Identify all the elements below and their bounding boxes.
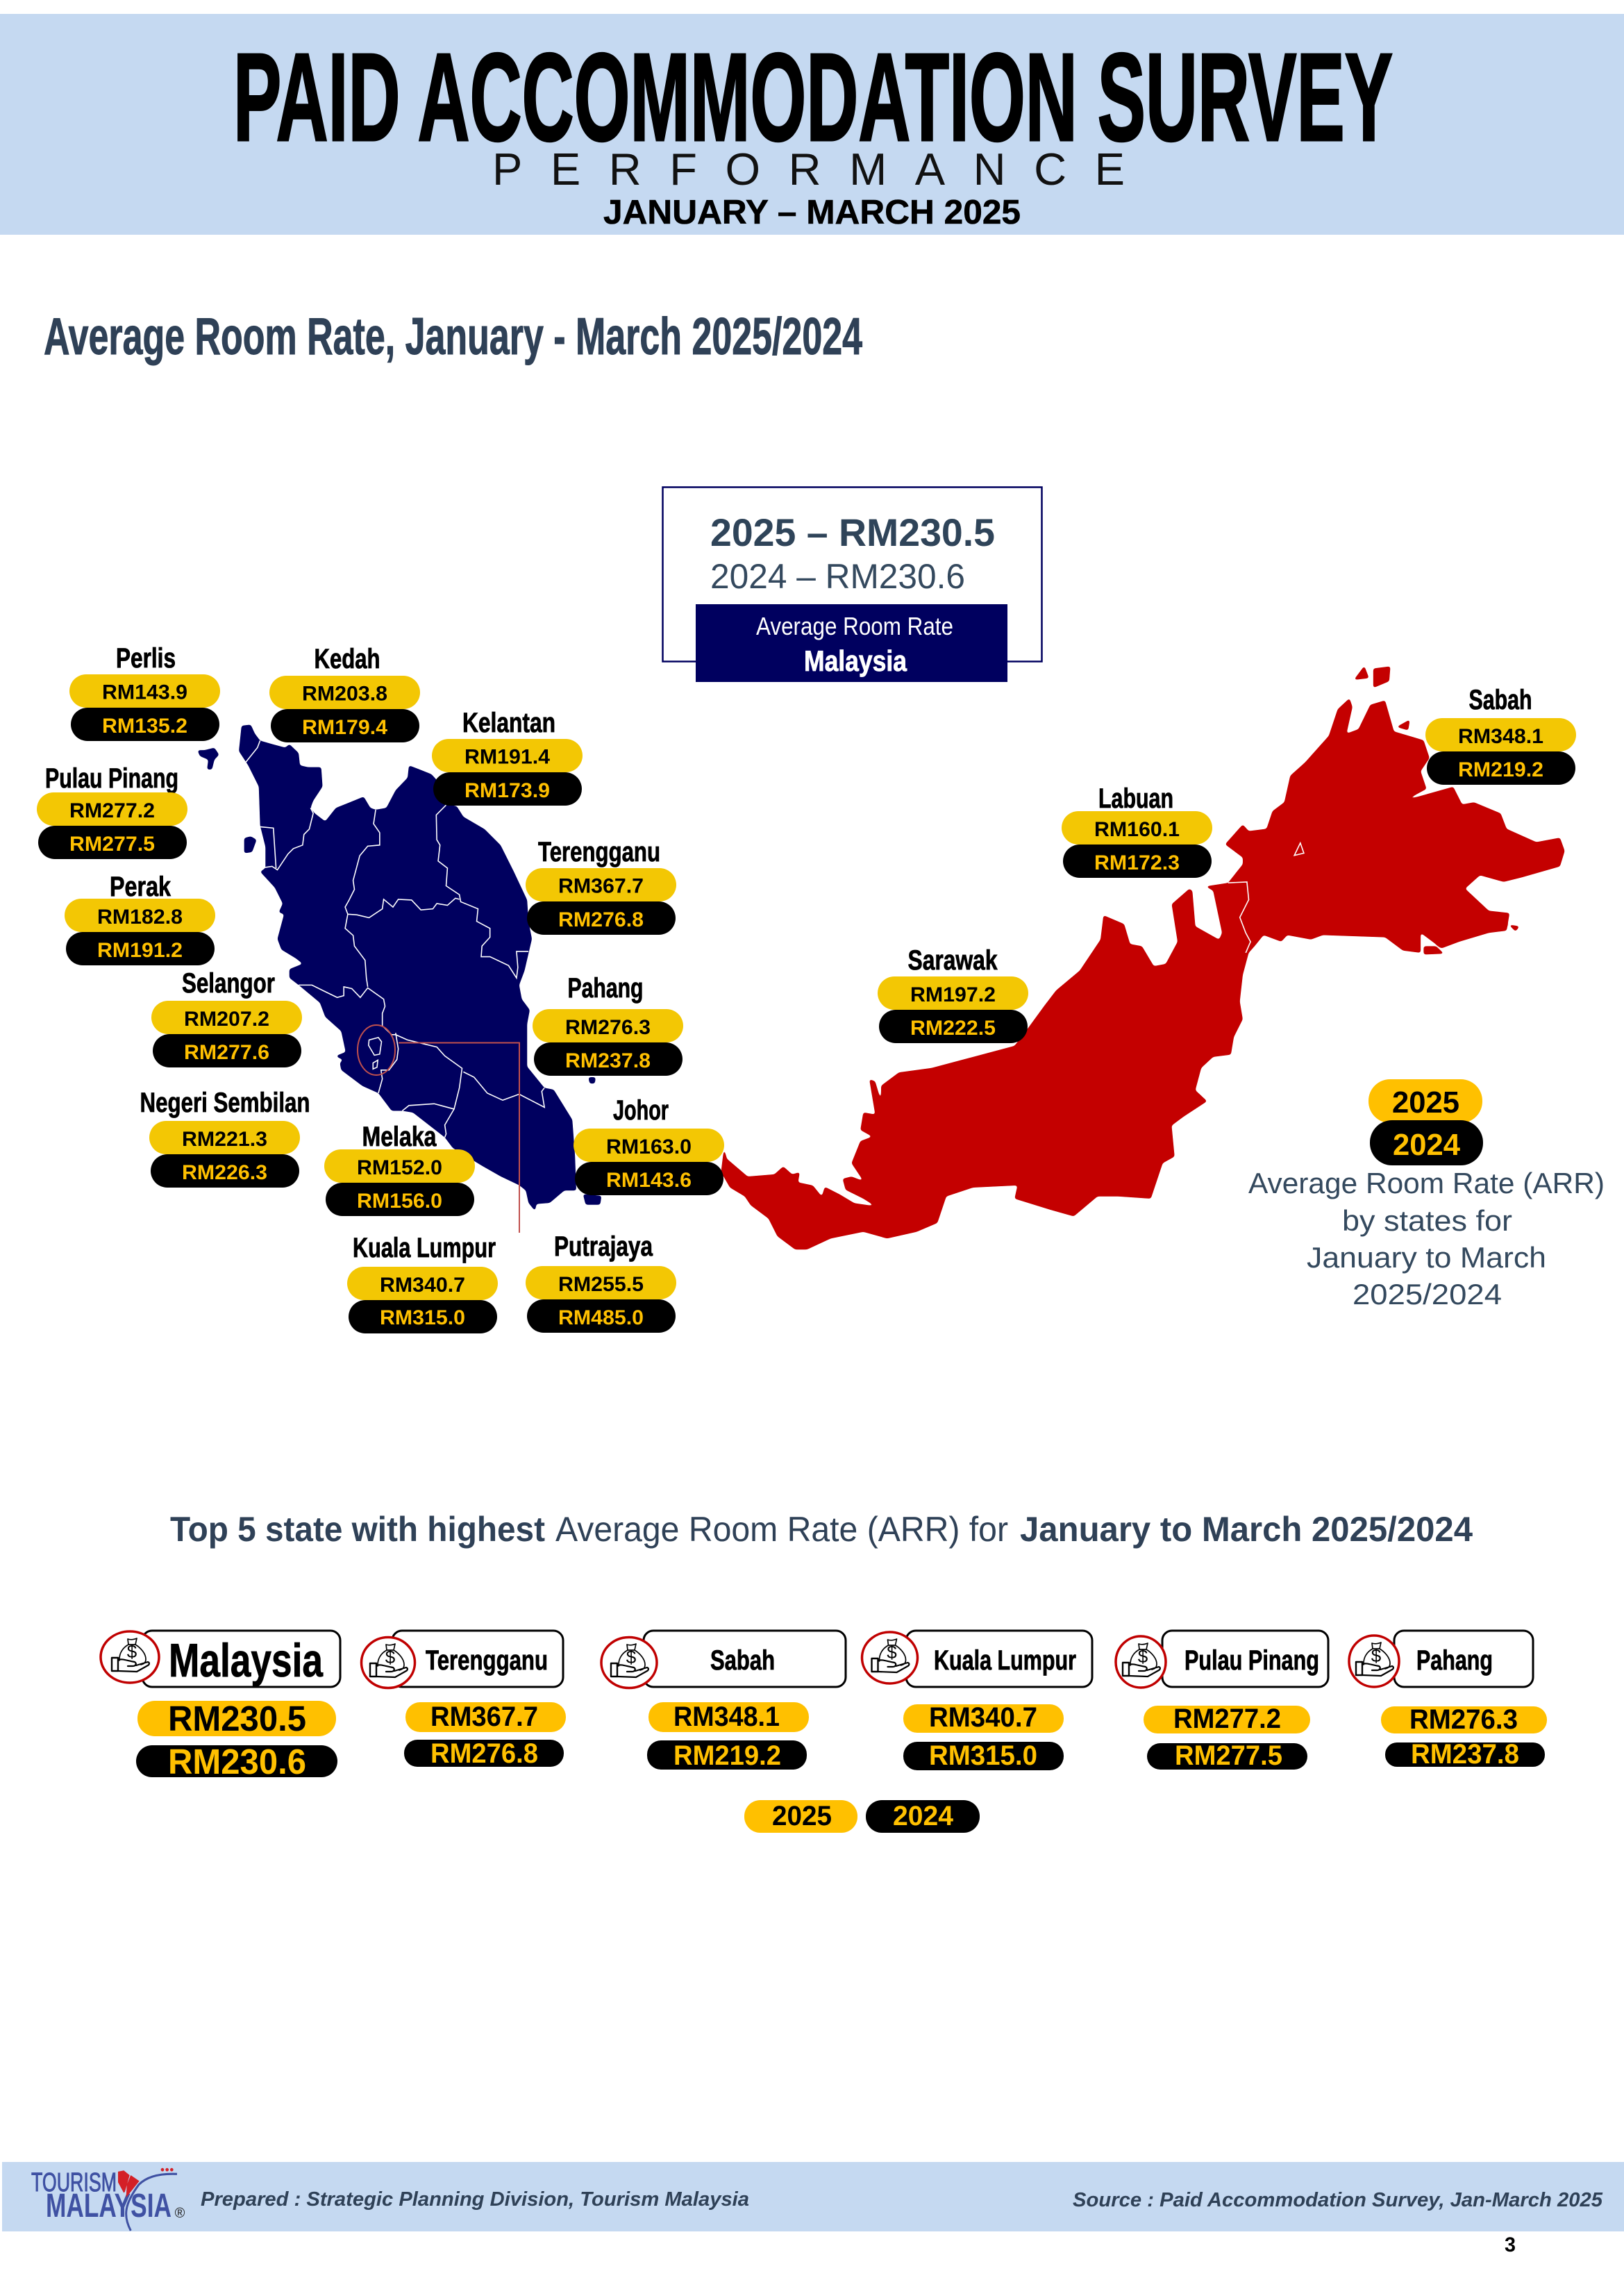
state borders: Borneo xyxy=(1228,843,1304,953)
state: Kuala Lumpur: RM340.7 xyxy=(380,1274,465,1297)
icon: money bag in hand: $ xyxy=(385,1647,396,1667)
logo: Tourism Malaysia xyxy=(31,2168,185,2231)
icon: money bag in hand: $ xyxy=(1371,1645,1382,1666)
card: Terengganu: RM276.8 xyxy=(430,1738,538,1769)
icon: money bag in hand xyxy=(862,1632,918,1683)
state: Pahang: RM276.3 xyxy=(565,1016,651,1039)
heading: top 5 states: Average Room Rate (ARR) for xyxy=(555,1510,1008,1549)
page number: 3 xyxy=(1505,2233,1516,2256)
card: Sabah xyxy=(601,1631,846,1771)
legend pill 2024 xyxy=(1370,1120,1483,1165)
state: Terengganu: Terengganu xyxy=(538,837,660,867)
state: Selangor xyxy=(151,968,302,1067)
state: Negeri Sembilan: Negeri Sembilan xyxy=(140,1088,310,1118)
state: Selangor: Selangor xyxy=(182,968,275,999)
state: Perak xyxy=(65,872,215,965)
state: Melaka: Melaka xyxy=(362,1122,437,1152)
state: Johor: Johor xyxy=(613,1095,669,1126)
state: Perlis: Perlis xyxy=(116,643,176,674)
heading: top 5 states xyxy=(170,1510,1473,1549)
map: Peninsular Malaysia xyxy=(197,724,601,1211)
state: Kuala Lumpur xyxy=(347,1233,498,1333)
icon: money bag in hand xyxy=(601,1638,657,1688)
state borders: Peninsular Malaysia xyxy=(246,740,544,1138)
legend year 2024: 2024 xyxy=(893,1801,954,1831)
kuala lumpur and putrajaya leader xyxy=(358,1025,519,1233)
card: Pulau Pinang: Pulau Pinang xyxy=(1184,1645,1319,1676)
callout label Malaysia: Malaysia xyxy=(804,644,907,677)
state: Kelantan: RM191.4 xyxy=(464,746,550,768)
state: Terengganu xyxy=(526,837,676,935)
callout value 2024: 2024 – RM230.6 xyxy=(710,557,965,596)
state: Labuan: Labuan xyxy=(1098,783,1173,814)
icon: money bag in hand: $ xyxy=(887,1642,897,1663)
state: Pahang xyxy=(533,973,683,1076)
legend description xyxy=(1248,1167,1605,1311)
state: Labuan: RM172.3 xyxy=(1094,851,1180,874)
footer: prepared by: Prepared : Strategic Planning Division, Tourism Malaysia xyxy=(201,2188,749,2211)
logo: Tourism Malaysia: ® xyxy=(175,2206,185,2221)
state: Pulau Pinang: RM277.2 xyxy=(69,799,155,822)
state: Pulau Pinang xyxy=(37,763,187,859)
callout label text: Average Room Rate xyxy=(756,612,953,640)
state: Selangor: RM277.6 xyxy=(184,1041,269,1064)
icon: money bag in hand: $ xyxy=(1138,1646,1148,1667)
state: Sabah: RM219.2 xyxy=(1458,758,1543,781)
state: Melaka: RM152.0 xyxy=(357,1156,442,1179)
card: Kuala Lumpur: RM340.7 xyxy=(929,1702,1037,1733)
state: Sarawak: Sarawak xyxy=(908,945,998,976)
heading: top 5 states: Top 5 state with highest xyxy=(170,1510,545,1549)
card: Kuala Lumpur: Kuala Lumpur xyxy=(934,1645,1076,1676)
card: Pahang: RM276.3 xyxy=(1409,1704,1518,1735)
legend pill 2025 xyxy=(1368,1079,1482,1123)
state: Kelantan: RM173.9 xyxy=(464,779,550,802)
card: Malaysia xyxy=(101,1631,340,1781)
state: Kedah: RM179.4 xyxy=(302,716,387,739)
state: Kuala Lumpur: RM315.0 xyxy=(380,1306,465,1329)
logo: Tourism Malaysia: TOURISM xyxy=(31,2168,117,2197)
footer: source: Source : Paid Accommodation Survey, Jan-March 2025 xyxy=(1073,2189,1603,2211)
card: Pahang: Pahang xyxy=(1416,1645,1493,1676)
icon: money bag in hand: $ xyxy=(626,1647,637,1667)
national average callout xyxy=(662,488,1041,682)
state: Pahang: Pahang xyxy=(568,973,643,1004)
callout navy label xyxy=(696,604,1007,682)
state: Labuan: RM160.1 xyxy=(1094,818,1180,841)
legend year 2025: 2025 xyxy=(1392,1085,1459,1120)
map: Borneo states xyxy=(721,666,1565,1249)
logo: Tourism Malaysia: MALAYSIA xyxy=(46,2188,171,2224)
legend description: 2025/2024 xyxy=(1353,1278,1502,1311)
state: Sarawak: RM197.2 xyxy=(910,983,996,1006)
card: Pulau Pinang: RM277.2 xyxy=(1173,1704,1281,1734)
map legend xyxy=(1248,1079,1605,1311)
state: Sabah: Sabah xyxy=(1469,685,1532,715)
section heading: average room rate: Average Room Rate, January - March 2025/2024 xyxy=(44,307,862,365)
icon: money bag in hand xyxy=(1349,1636,1399,1687)
card: Malaysia: RM230.6 xyxy=(168,1742,306,1781)
icon: money bag in hand: $ xyxy=(127,1641,137,1662)
legend description: by states for xyxy=(1342,1204,1512,1237)
state: Terengganu: RM367.7 xyxy=(558,875,644,897)
icon: money bag in hand xyxy=(1116,1636,1166,1688)
state: Perlis xyxy=(69,643,220,741)
state: Johor: RM163.0 xyxy=(606,1135,692,1158)
card: Pahang: RM237.8 xyxy=(1411,1739,1519,1770)
heading: top 5 states: January to March 2025/2024 xyxy=(1020,1510,1473,1549)
card: Sabah: Sabah xyxy=(710,1645,775,1676)
state: Kelantan: Kelantan xyxy=(462,708,555,738)
subtitle: period: JANUARY – MARCH 2025 xyxy=(603,194,1021,231)
state: Negeri Sembilan: RM226.3 xyxy=(182,1161,267,1184)
state: Perak: RM182.8 xyxy=(97,906,183,929)
header band xyxy=(0,14,1624,235)
state: Melaka xyxy=(324,1122,475,1216)
callout frame xyxy=(662,488,1041,661)
state: Putrajaya: Putrajaya xyxy=(554,1231,653,1262)
card: Sabah: RM219.2 xyxy=(673,1740,781,1771)
state: Putrajaya: RM255.5 xyxy=(558,1273,644,1296)
subtitle: performance: PERFORMANCE xyxy=(492,144,1125,194)
state: Melaka: RM156.0 xyxy=(357,1190,442,1213)
state: Perlis: RM143.9 xyxy=(102,681,187,704)
bottom legend xyxy=(744,1800,980,1833)
footer band xyxy=(2,2162,1624,2231)
card: Pulau Pinang xyxy=(1116,1631,1328,1771)
state: Kuala Lumpur: Kuala Lumpur xyxy=(353,1233,496,1263)
legend pill 2025 xyxy=(744,1800,857,1833)
state: Putrajaya: RM485.0 xyxy=(558,1306,644,1329)
card: Terengganu: RM367.7 xyxy=(430,1702,538,1732)
legend pill 2024 xyxy=(866,1800,980,1833)
card: Malaysia: Malaysia xyxy=(169,1634,324,1687)
state: Sarawak: RM222.5 xyxy=(910,1017,996,1040)
card: Terengganu xyxy=(361,1631,566,1769)
legend description: Average Room Rate (ARR) xyxy=(1248,1167,1605,1199)
state: Negeri Sembilan: RM221.3 xyxy=(182,1128,267,1151)
state: Labuan xyxy=(1062,783,1212,878)
icon: money bag in hand xyxy=(101,1631,159,1683)
state: Sabah: RM348.1 xyxy=(1458,725,1543,748)
state: Sarawak xyxy=(878,945,1028,1043)
state: Perlis: RM135.2 xyxy=(102,715,187,738)
card: Kuala Lumpur xyxy=(862,1631,1092,1771)
state: Terengganu: RM276.8 xyxy=(558,908,644,931)
state: Perak: Perak xyxy=(110,872,171,902)
card: Kuala Lumpur: RM315.0 xyxy=(929,1740,1037,1771)
icon: money bag in hand xyxy=(361,1638,415,1688)
state: Kelantan xyxy=(432,708,583,806)
card: Pulau Pinang: RM277.5 xyxy=(1175,1740,1282,1771)
state: Kedah xyxy=(269,644,420,742)
legend year 2025: 2025 xyxy=(772,1801,832,1831)
state: Negeri Sembilan xyxy=(140,1088,310,1188)
state: Pulau Pinang: RM277.5 xyxy=(69,833,155,856)
legend description: January to March xyxy=(1307,1241,1546,1274)
state: Perak: RM191.2 xyxy=(97,939,183,962)
legend year 2024: 2024 xyxy=(1393,1128,1461,1162)
state: Sabah xyxy=(1425,685,1576,785)
state: Kedah: RM203.8 xyxy=(302,682,387,706)
state: Kedah: Kedah xyxy=(314,644,380,674)
state: Selangor: RM207.2 xyxy=(184,1008,269,1031)
state: Johor xyxy=(574,1095,724,1195)
card: Malaysia: RM230.5 xyxy=(168,1699,306,1738)
state: Pahang: RM237.8 xyxy=(565,1049,651,1072)
state: Putrajaya xyxy=(526,1231,676,1333)
card: Pahang xyxy=(1349,1631,1547,1770)
state: Pulau Pinang: Pulau Pinang xyxy=(45,763,178,794)
card: Terengganu: Terengganu xyxy=(426,1645,548,1676)
card: Sabah: RM348.1 xyxy=(673,1702,780,1732)
state: Johor: RM143.6 xyxy=(606,1169,692,1192)
callout value 2025: 2025 – RM230.5 xyxy=(710,510,995,554)
